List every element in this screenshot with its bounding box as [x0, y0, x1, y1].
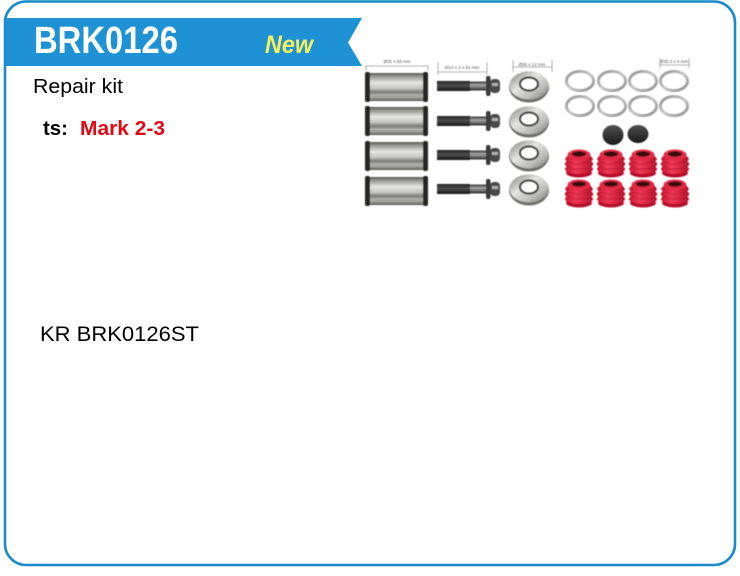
dimension label: rings: Ø35.3 x 4 mm [660, 59, 688, 64]
description: repair kit: Repair kit [33, 76, 123, 98]
part code: KR BRK0126ST [40, 323, 199, 346]
red rubber boots [565, 150, 689, 208]
dimension label: bolts: M14 x 2 x 61 mm [445, 65, 480, 70]
value: Mark 2-3: Mark 2-3 [80, 118, 165, 140]
dimension label: washers: Ø56 x 12 mm [518, 62, 546, 67]
dimension label: bolts [438, 62, 487, 75]
washers [509, 72, 549, 206]
black caps [602, 125, 648, 145]
dimension label: sleeves: Ø35 x 69 mm [383, 59, 411, 64]
bolts [437, 76, 500, 199]
title: part number: BRK0126 [34, 20, 178, 62]
title ribbon [6, 18, 362, 66]
label: ts: ts: [43, 118, 68, 140]
metal rings [566, 72, 688, 116]
sleeves [365, 72, 428, 206]
dimension label: washers [513, 60, 552, 72]
product photo: repair kit parts [365, 58, 689, 208]
new badge text: New [265, 31, 314, 59]
dimension label: rings [660, 58, 689, 68]
dimension label: sleeves [366, 59, 428, 71]
